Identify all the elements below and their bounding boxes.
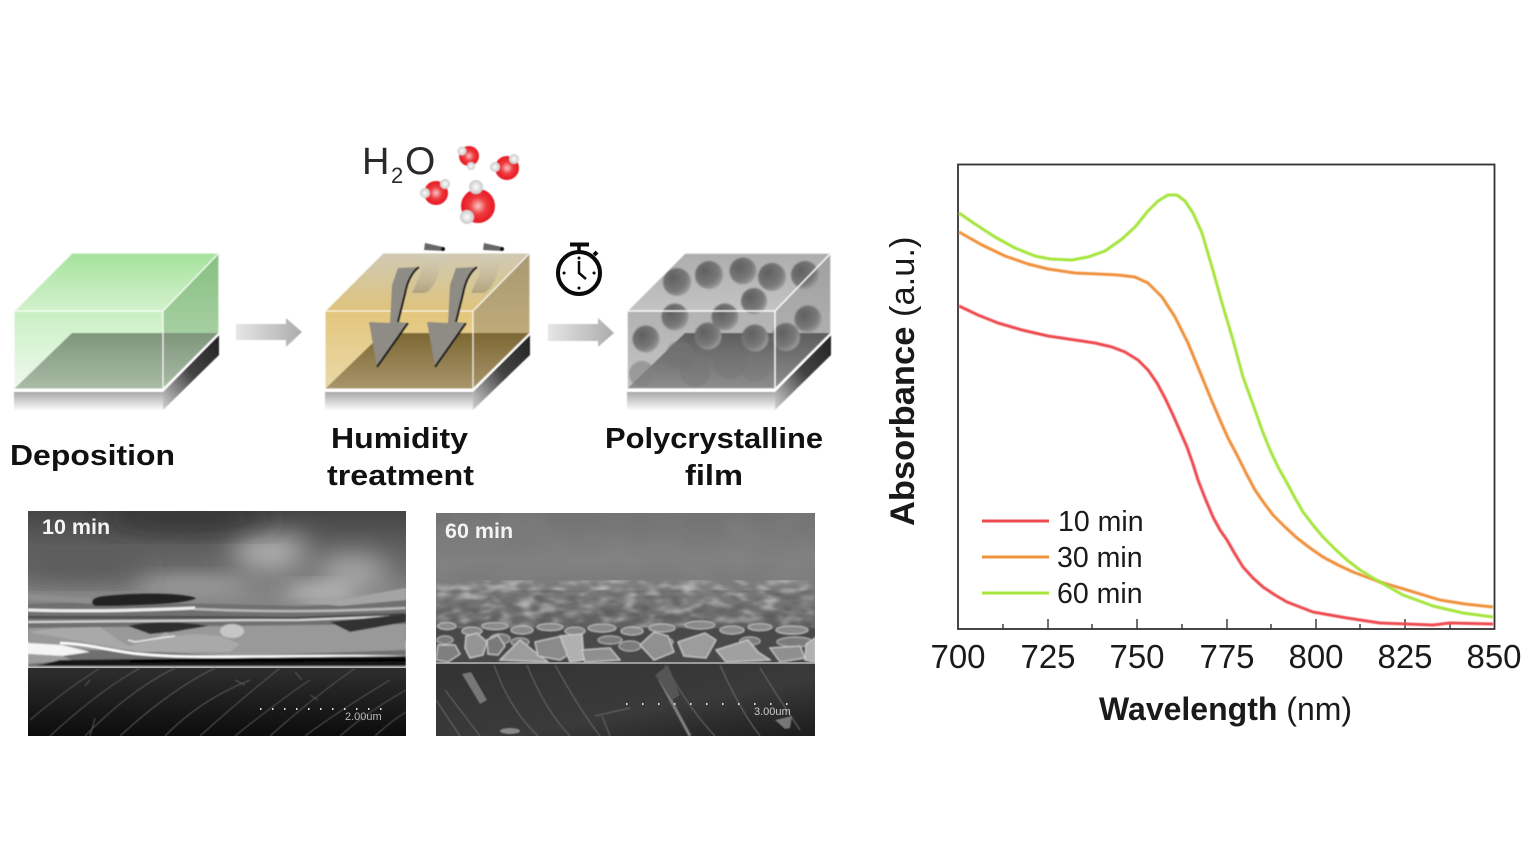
arrow: humidity to polycrystalline [548,318,614,347]
label: Polycrystalline film [605,423,823,492]
plot frame and ticks [958,164,1494,629]
legend: 60 min [1057,578,1143,610]
x axis title: Wavelength (nm) [1099,691,1352,727]
label: H2O: O [405,140,435,183]
diagram: humidity treatment film stack [325,243,530,410]
curve: 60 min [959,195,1493,617]
x axis tick labels: 825 [1377,638,1433,675]
label: 10 min: 10 min [42,515,110,539]
label: 60 min: 60 min [445,519,513,543]
SEM image: 10 min [10,508,406,736]
icon: water molecules [420,146,519,224]
diagram: polycrystalline film stack [627,253,831,410]
x axis tick labels: 725 [1020,638,1076,675]
label: H2O: 2 [391,163,403,188]
label: Humidity treatment [327,423,474,492]
y axis title: Absorbance (a.u.) [884,236,922,526]
scale bar: 2.00um: 2.00um [345,711,382,723]
arrow: deposition to humidity [236,318,302,347]
SEM image: 60 min [436,513,815,736]
scale bar: 3.00um: 3.00um [754,706,791,718]
legend: 10 min [1058,506,1144,538]
scale bar: 2.00um [260,708,382,720]
x axis tick labels: 700 [930,638,986,675]
label: H2O: H [362,141,389,183]
grains [629,258,822,387]
x axis tick labels: 750 [1109,638,1165,675]
label: Humidity treatment: Humidity [331,423,468,455]
label: Polycrystalline film: Polycrystalline [605,423,823,455]
x axis tick labels: 850 [1466,638,1522,675]
label: Polycrystalline film: film [685,460,743,492]
icon: moisture arrow tails entering surface [412,243,504,293]
x axis tick labels: 800 [1288,638,1344,675]
x axis tick labels: 775 [1199,638,1255,675]
icon: stopwatch [558,244,600,294]
x axis tick labels [930,638,1522,675]
curve: 30 min [959,232,1493,607]
legend [982,506,1144,610]
diagram: deposition film stack [14,253,219,410]
icon: two curved downward arrows [369,267,477,367]
grains [436,621,815,664]
label: H2O [362,140,435,188]
label: Deposition: Deposition [10,440,175,472]
label: Humidity treatment: treatment [327,460,474,492]
chart: absorbance vs wavelength [884,164,1522,727]
legend: 30 min [1057,542,1143,574]
curve: 10 min [959,306,1493,625]
